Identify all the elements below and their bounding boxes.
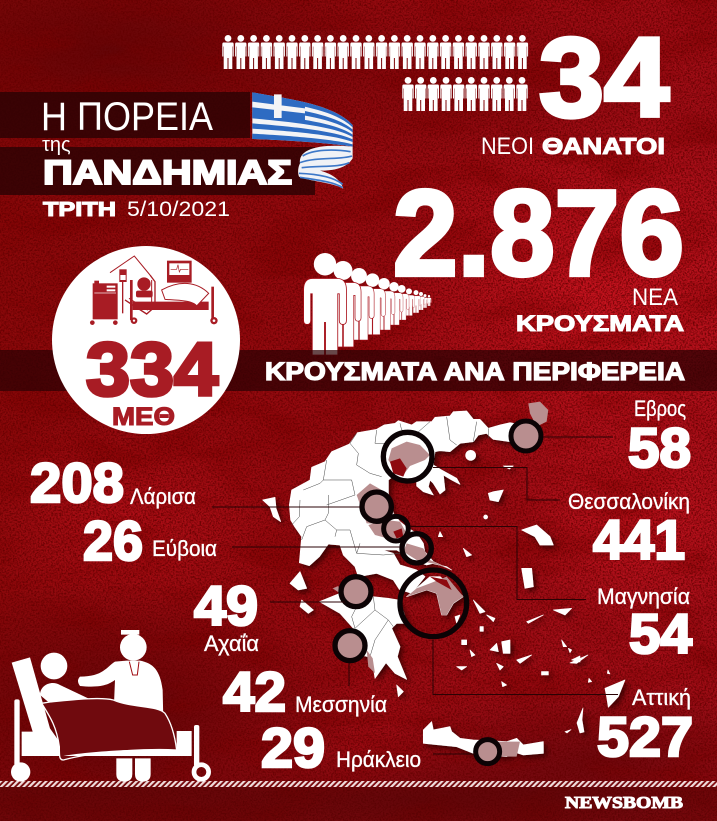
title block: 5/10/2021 <box>127 198 230 221</box>
region: Μαγνησία: Μαγνησία <box>597 584 690 609</box>
region: Λάρισα <box>30 451 196 514</box>
region: Θεσσαλονίκη: 441 <box>593 508 685 571</box>
region: Μεσσηνία <box>223 660 387 723</box>
band heading: ΚΡΟΥΣΜΑΤΑ ΑΝΑ ΠΕΡΙΦΕΡΕΙΑ <box>0 350 717 391</box>
label: ΝΕΑ ΚΡΟΥΣΜΑΤΑ: ΝΕΑ <box>632 284 678 311</box>
label: ΝΕΟΙ ΘΑΝΑΤΟΙ: ΘΑΝΑΤΟΙ <box>542 133 665 159</box>
region: Μεσσηνία: 42 <box>223 660 286 723</box>
label: ΝΕΟΙ ΘΑΝΑΤΟΙ: ΝΕΟΙ <box>481 133 534 160</box>
mainland and islands <box>263 411 625 757</box>
region: Εύβοια: 26 <box>83 509 143 572</box>
deaths count: 34: 34 <box>539 15 669 140</box>
region: Λάρισα: Λάρισα <box>130 484 196 509</box>
icon: Greek flag ribbon <box>252 92 353 189</box>
hatched floor strip <box>0 781 717 787</box>
region: Μαγνησία: 54 <box>629 602 692 665</box>
map of Greece with regional highlights <box>263 402 625 764</box>
region: Θεσσαλονίκη: Θεσσαλονίκη <box>568 489 690 514</box>
icon: ICU bed and monitors <box>90 256 218 325</box>
region: Εύβοια: Εύβοια <box>152 536 217 561</box>
heading: Η ΠΟΡΕΙΑ: Η ΠΟΡΕΙΑ <box>41 95 213 139</box>
region: Αχαΐα: Αχαΐα <box>204 631 259 656</box>
icon: receding line of people <box>304 253 431 355</box>
number: 334: 334 <box>86 327 218 411</box>
cases count: 2.876: 2.876 <box>393 165 684 301</box>
region: Ηράκλειο: 29 <box>261 716 325 779</box>
leader lines <box>212 437 618 754</box>
heading: ΠΑΝΔΗΜΙΑΣ: ΠΑΝΔΗΜΙΑΣ <box>43 154 292 192</box>
logo: NEWSBOMB: NEWSBOMB <box>565 793 683 812</box>
region: Εύβοια <box>83 509 217 572</box>
region: Ηράκλειο <box>261 716 421 779</box>
ICU circle: 334 ΜΕΘ <box>52 246 240 434</box>
title block <box>0 92 353 221</box>
heading: της: της <box>42 134 71 156</box>
region: Έβρος: Εβρος <box>634 396 686 421</box>
marker circles <box>335 421 541 764</box>
region: Λάρισα: 208 <box>30 451 124 514</box>
region: Θεσσαλονίκη <box>568 489 690 571</box>
icon: doctor with patient in bed <box>11 630 209 782</box>
region: Έβρος: 58 <box>628 416 691 479</box>
region: Αττική: 527 <box>597 705 693 768</box>
region: Ηράκλειο: Ηράκλειο <box>336 747 421 772</box>
regional borders <box>292 417 488 657</box>
highlighted regions <box>333 402 548 762</box>
region: Μεσσηνία: Μεσσηνία <box>295 692 387 717</box>
region: Μαγνησία <box>597 584 692 665</box>
region: Αχαΐα: 49 <box>194 574 258 637</box>
icon: 34 person pictograms <box>222 35 528 111</box>
date: ΤΡΙΤΗ <box>43 199 116 221</box>
label: ΝΕΟΙ ΘΑΝΑΤΟΙ <box>481 133 665 160</box>
label: ΝΕΑ ΚΡΟΥΣΜΑΤΑ <box>516 284 684 336</box>
label: ΝΕΑ ΚΡΟΥΣΜΑΤΑ: ΚΡΟΥΣΜΑΤΑ <box>516 311 684 336</box>
band heading: ΚΡΟΥΣΜΑΤΑ ΑΝΑ ΠΕΡΙΦΕΡΕΙΑ: ΚΡΟΥΣΜΑΤΑ ΑΝΑ ΠΕΡΙΦΕΡΕΙΑ <box>265 358 685 386</box>
label: ΜΕΘ: ΜΕΘ <box>112 403 175 431</box>
region: Αττική: Αττική <box>632 685 691 710</box>
